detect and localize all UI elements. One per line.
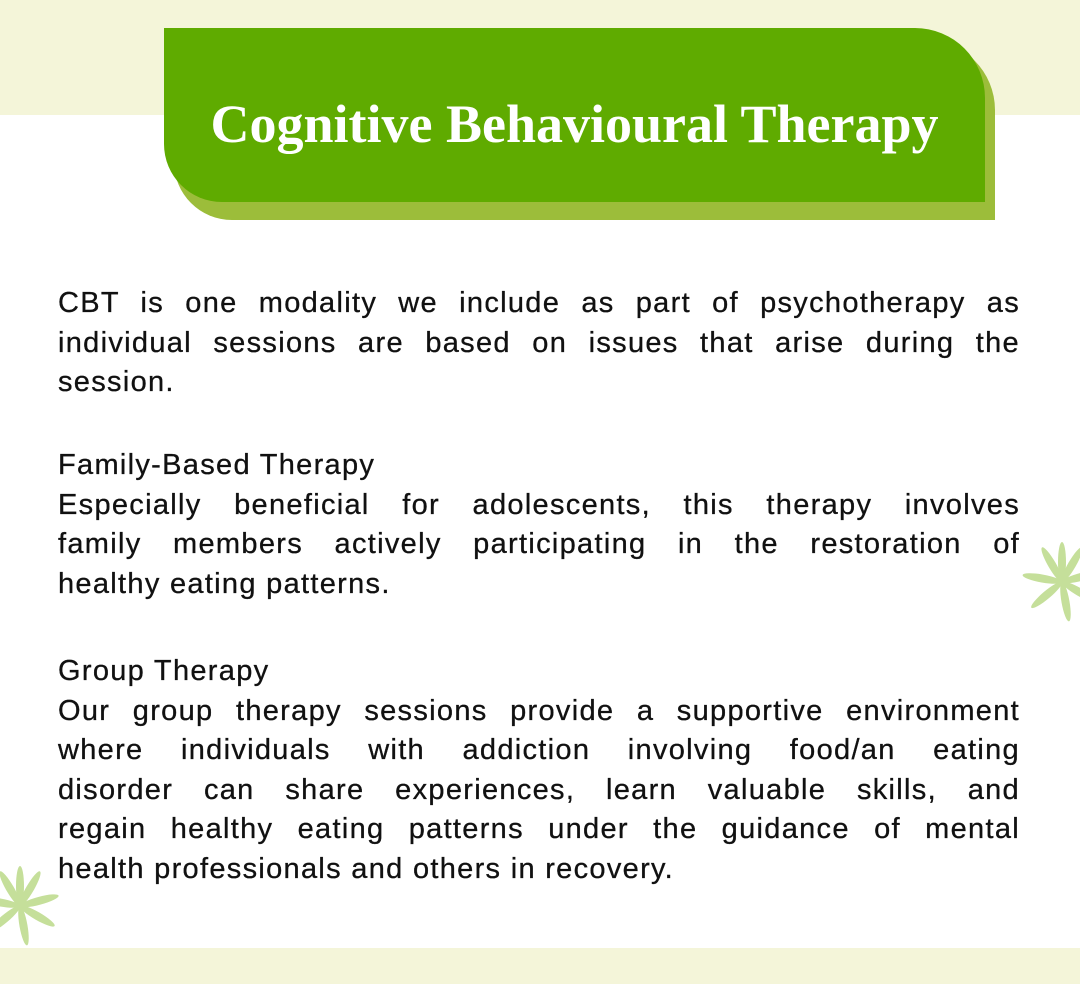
text: group therapy: Group Therapy	[58, 655, 269, 687]
text: family-based therapy: family members actively participating in the restoration of	[58, 528, 1020, 560]
text: family-based therapy: Especially beneficial for adolescents, this therapy involves	[58, 488, 1020, 520]
text: group therapy: health professionals and others in recovery.	[58, 852, 674, 884]
icon: flower left	[0, 866, 59, 946]
text: family-based therapy: Family-Based Therapy	[58, 449, 375, 481]
icon: flower right	[1022, 542, 1080, 622]
text: group therapy: regain healthy eating patterns under the guidance of mental	[58, 813, 1020, 845]
text: family-based therapy: healthy eating patterns.	[58, 568, 391, 600]
text: CBT intro: individual sessions are based on issues that arise during the	[58, 326, 1020, 358]
text: group therapy: where individuals with addiction involving food/an eating	[58, 734, 1020, 766]
text: CBT intro	[58, 287, 1020, 398]
text: CBT intro: CBT is one modality we include as part of psychotherapy as	[58, 287, 1020, 319]
title: Cognitive Behavioural Therapy	[210, 94, 939, 154]
text: family-based therapy	[58, 449, 1020, 600]
text: CBT intro: session.	[58, 366, 175, 398]
text: group therapy: Our group therapy sessions provide a supportive environment	[58, 694, 1020, 726]
text: group therapy	[58, 655, 1020, 884]
text: group therapy: disorder can share experiences, learn valuable skills, and	[58, 774, 1020, 806]
title banner	[164, 28, 995, 220]
